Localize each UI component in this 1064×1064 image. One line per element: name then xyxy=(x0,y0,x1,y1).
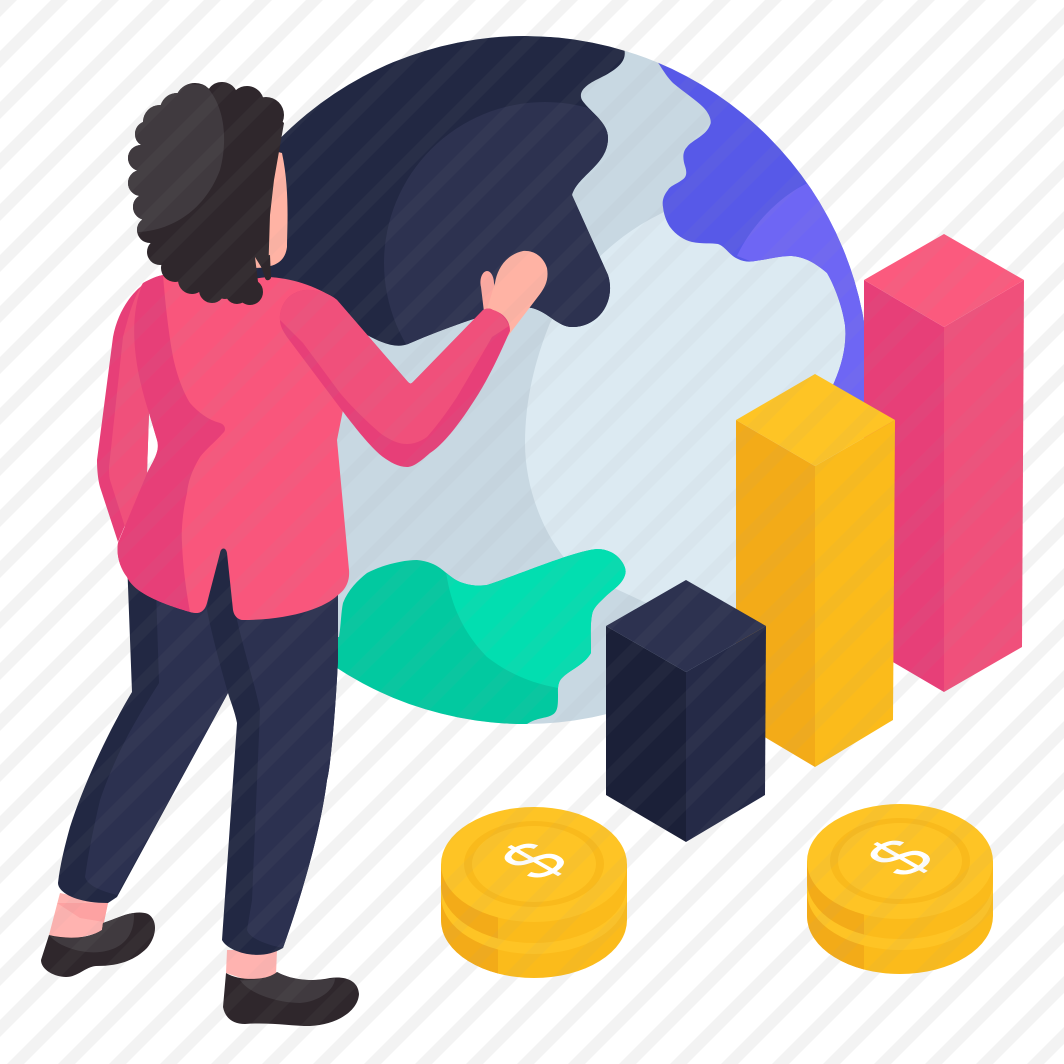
bar: navy xyxy=(606,580,766,842)
continent: purple east xyxy=(658,62,864,402)
continent: green south xyxy=(338,549,626,724)
hair highlight xyxy=(128,84,224,232)
hair xyxy=(128,82,284,305)
globe xyxy=(256,36,864,724)
skin: ankles xyxy=(49,893,277,981)
shoe: left foot xyxy=(41,913,155,977)
bar chart xyxy=(606,234,1024,842)
trousers: back leg xyxy=(58,540,240,903)
dollar sign: $ xyxy=(482,831,586,891)
shoe: right foot xyxy=(223,972,359,1026)
coin stack: left xyxy=(441,807,627,978)
continent: dark north-west xyxy=(256,36,625,346)
arm: raised xyxy=(280,251,548,467)
bar: red xyxy=(864,234,1024,692)
trousers: front leg xyxy=(207,535,338,955)
bar: yellow xyxy=(736,374,895,767)
coin stack: right xyxy=(807,804,993,974)
globe highlight xyxy=(525,212,846,608)
coat: body xyxy=(117,275,349,620)
coat: back shadow xyxy=(117,275,225,612)
coat: left sleeve xyxy=(97,275,165,542)
hand xyxy=(480,251,548,336)
skin: ear and neck xyxy=(253,150,288,268)
hair strand over collar xyxy=(258,255,271,280)
dollar sign: $ xyxy=(848,828,952,888)
person xyxy=(41,70,548,1026)
